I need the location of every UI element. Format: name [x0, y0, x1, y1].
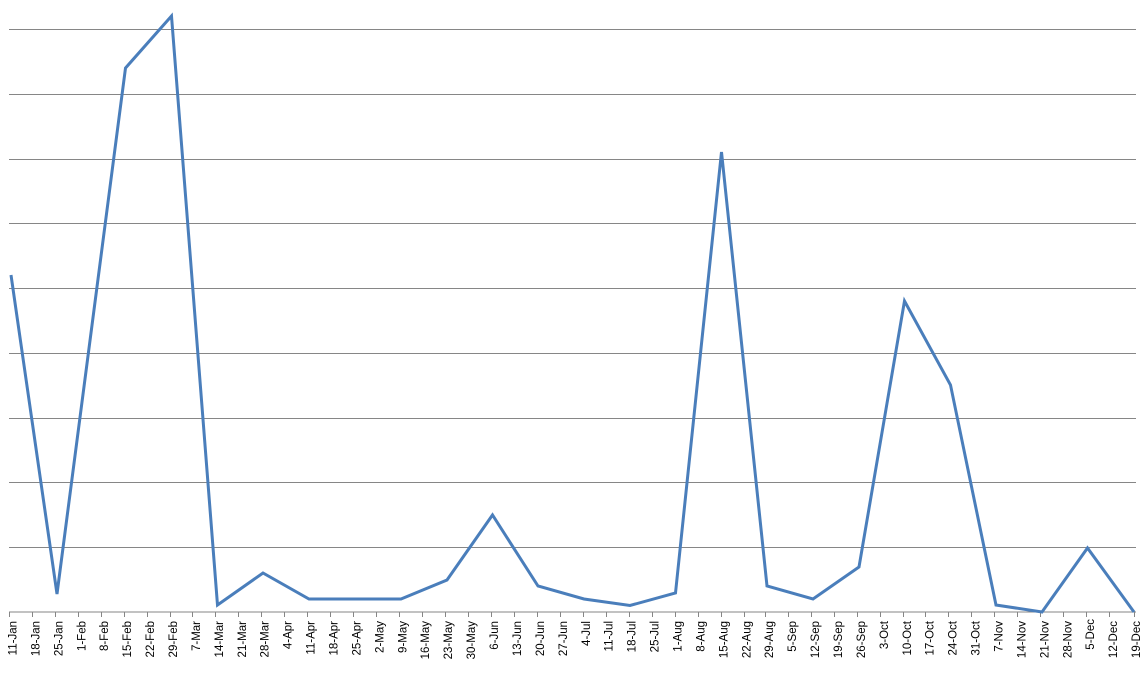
- x axis labels: 23-May: [443, 621, 455, 659]
- x axis labels: 5-Sep: [787, 621, 799, 652]
- x axis labels: 11-Jan: [8, 621, 20, 655]
- x axis labels: 22-Feb: [145, 621, 157, 657]
- x axis labels: 26-Sep: [856, 621, 868, 658]
- x axis labels: 11-Apr: [306, 621, 318, 655]
- x axis labels: 3-Oct: [879, 620, 891, 649]
- x axis labels: 18-Jul: [627, 621, 639, 652]
- x axis labels: 14-Nov: [1016, 621, 1028, 658]
- x axis labels: [8, 619, 1143, 659]
- x axis labels: 1-Feb: [76, 621, 88, 651]
- x axis labels: 8-Aug: [695, 621, 707, 652]
- x axis labels: 25-Jul: [650, 621, 662, 652]
- x axis labels: 1-Aug: [672, 621, 684, 652]
- x axis labels: 19-Sep: [833, 621, 845, 658]
- x axis labels: 11-Jul: [604, 621, 616, 651]
- x axis labels: 6-Jun: [489, 621, 501, 650]
- x axis labels: 18-Jan: [30, 621, 42, 656]
- x axis labels: 21-Nov: [1039, 621, 1051, 658]
- x axis labels: 25-Jan: [53, 621, 65, 656]
- x axis labels: 21-Mar: [237, 621, 249, 657]
- x axis labels: 17-Oct: [925, 620, 937, 656]
- x axis labels: 12-Sep: [810, 621, 822, 658]
- x axis labels: 16-May: [420, 621, 432, 659]
- x axis labels: 8-Feb: [99, 621, 111, 651]
- x axis labels: 25-Apr: [352, 621, 364, 656]
- x axis labels: 22-Aug: [741, 621, 753, 658]
- x axis labels: 28-Nov: [1062, 621, 1074, 658]
- x axis labels: 31-Oct: [971, 620, 983, 656]
- x axis labels: 18-Apr: [328, 621, 340, 656]
- x axis labels: 7-Nov: [994, 621, 1006, 652]
- x axis labels: 4-Jul: [581, 621, 593, 646]
- x axis labels: 15-Aug: [718, 621, 730, 658]
- x axis labels: 4-Apr: [283, 621, 295, 649]
- x axis labels: 24-Oct: [948, 620, 960, 656]
- x axis labels: 12-Dec: [1108, 621, 1120, 658]
- x axis labels: 29-Aug: [764, 621, 776, 658]
- x axis labels: 30-May: [466, 621, 478, 659]
- x axis: [9, 612, 1136, 617]
- x axis labels: 10-Oct: [902, 620, 914, 656]
- x axis labels: 19-Dec: [1131, 621, 1143, 658]
- x axis labels: 28-Mar: [260, 621, 272, 657]
- x axis labels: 7-Mar: [191, 621, 203, 651]
- x axis labels: 15-Feb: [122, 621, 134, 657]
- x axis labels: 29-Feb: [168, 621, 180, 657]
- x axis labels: 2-May: [374, 621, 386, 653]
- x axis labels: 27-Jun: [558, 621, 570, 656]
- x axis labels: 14-Mar: [214, 621, 226, 657]
- x axis labels: 13-Jun: [512, 621, 524, 656]
- x axis labels: 5-Dec: [1085, 619, 1097, 650]
- x axis labels: 9-May: [397, 621, 409, 653]
- x axis labels: 20-Jun: [535, 621, 547, 656]
